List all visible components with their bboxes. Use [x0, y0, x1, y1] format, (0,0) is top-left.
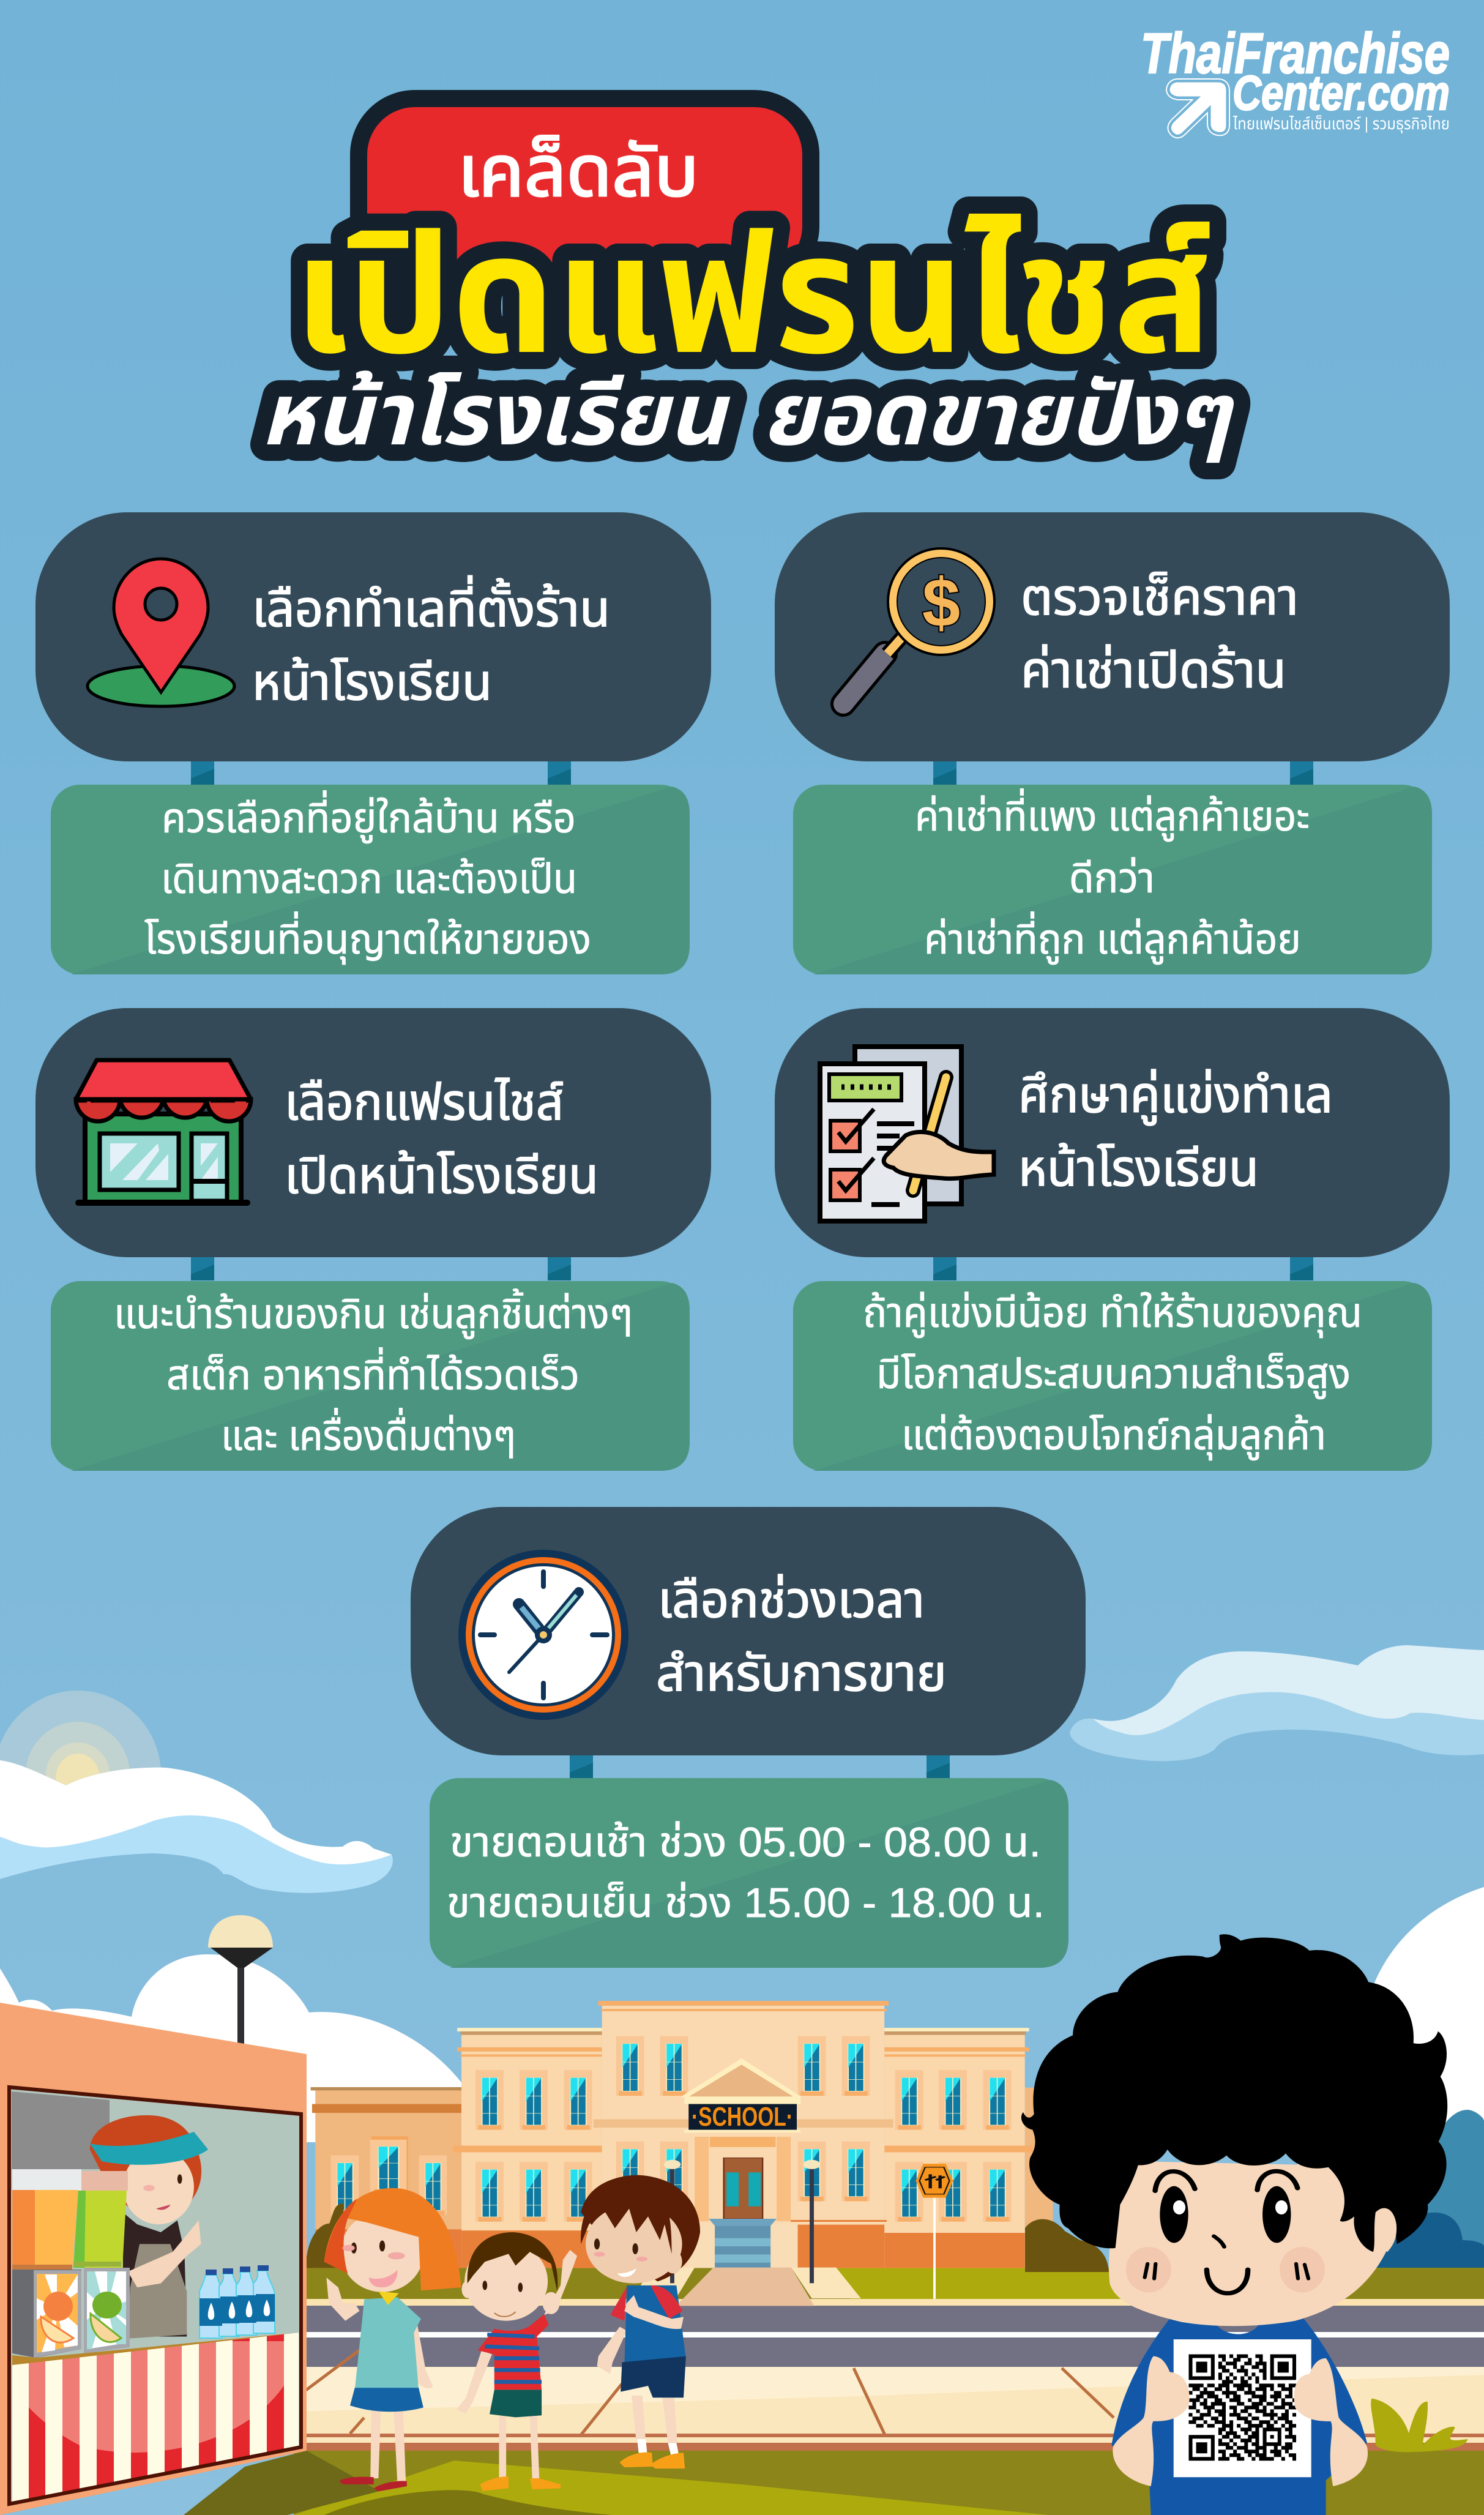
vendor — [90, 2115, 208, 2339]
water bottles — [199, 2265, 275, 2338]
juice stall — [0, 2003, 307, 2515]
heading — [1021, 570, 1299, 698]
heading: เลือกแฟรนไชส์ — [285, 1075, 564, 1130]
school sign text: ·SCHOOL· — [692, 2102, 793, 2132]
panel: rent — [775, 512, 1450, 974]
tall boy — [581, 2175, 700, 2468]
sun — [0, 1691, 161, 1858]
detail text: เดินทางสะดวก และต้องเป็น — [161, 856, 577, 902]
ground: grass road and sidewalk — [184, 2268, 1484, 2515]
heading: ศึกษาคู่แข่งทำเล — [1018, 1067, 1333, 1126]
detail text: แต่ต้องตอบโจทย์กลุ่มลูกค้า — [901, 1412, 1326, 1460]
heading: หน้าโรงเรียน — [252, 655, 492, 711]
posts — [933, 761, 1313, 785]
sign board — [35, 512, 711, 761]
fruit boxes — [12, 2268, 130, 2358]
lamp posts — [664, 2160, 820, 2283]
title block — [260, 99, 1235, 463]
panel: franchise choice — [35, 1008, 711, 1471]
heading: หน้าโรงเรียน — [1018, 1141, 1259, 1197]
detail text: และ เครื่องดื่มต่างๆ — [221, 1408, 516, 1459]
mascot with QR code — [1021, 1934, 1447, 2515]
stall body — [0, 2003, 307, 2515]
logo: ThaiFranchise Center.com — [1141, 21, 1450, 133]
counter top — [12, 2333, 299, 2366]
heading: เปิดหน้าโรงเรียน — [285, 1148, 598, 1204]
detail text — [447, 1819, 1045, 1926]
detail card — [430, 1778, 1068, 1968]
sign board — [411, 1507, 1086, 1755]
icon: storefront — [76, 1060, 251, 1203]
detail card — [793, 1281, 1432, 1471]
qr card — [1174, 2339, 1311, 2477]
stairs and path — [634, 2219, 861, 2306]
shirt — [1111, 2314, 1367, 2515]
center block — [594, 2001, 893, 2268]
girl — [324, 2188, 461, 2491]
panel: location — [35, 512, 711, 974]
striped counter — [12, 2333, 299, 2502]
left wing — [453, 2028, 602, 2268]
heading: เลือกทำเลที่ตั้งร้าน — [252, 575, 610, 637]
sign board — [35, 1008, 711, 1257]
title line: หน้าโรงเรียน: หน้าโรงเรียน — [260, 366, 730, 463]
detail text: สเต็ก อาหารที่ทำได้รวดเร็ว — [166, 1347, 580, 1399]
children — [324, 2175, 700, 2491]
detail text: ถ้าคู่แข่งมีน้อย ทำให้ร้านของคุณ — [863, 1290, 1362, 1338]
lamp post — [208, 1915, 273, 2047]
eyes and expression — [1126, 2171, 1325, 2293]
school building — [306, 2001, 1053, 2306]
arms and fists — [1113, 2356, 1368, 2486]
heading: ตรวจเช็คราคา — [1021, 570, 1299, 626]
detail text — [144, 790, 591, 965]
detail text: โรงเรียนที่อนุญาตให้ขายของ — [144, 911, 591, 965]
cloud: right — [1070, 1645, 1484, 1761]
sign board — [775, 1008, 1450, 1257]
icon: clock — [458, 1550, 628, 1720]
heading: เลือกช่วงเวลา — [658, 1572, 925, 1628]
detail card — [51, 785, 690, 974]
icon: checklist and hand — [820, 1047, 994, 1221]
title badge: red tab — [359, 99, 811, 282]
detail text: แนะนำร้านของกิน เช่นลูกชิ้นต่างๆ — [114, 1288, 633, 1339]
heading: สำหรับการขาย — [656, 1646, 947, 1702]
detail text: มีโอกาสประสบนความสำเร็จสูง — [876, 1351, 1351, 1399]
detail text — [915, 788, 1310, 965]
detail text: ดีกว่า — [1069, 855, 1155, 902]
left annex — [311, 2087, 461, 2268]
detail text: ค่าเช่าที่ถูก แต่ลูกค้าน้อย — [924, 911, 1301, 965]
foreground plant — [1371, 2399, 1468, 2452]
posts — [191, 1257, 571, 1280]
panel: selling time — [411, 1507, 1086, 1968]
detail text — [863, 1290, 1362, 1460]
logo: ThaiFranchise Center.com: ไทยแฟรนไชส์เซ็นเตอร์ | รวมธุรกิจไทย — [1232, 114, 1450, 133]
clouds behind school — [0, 1887, 1484, 2301]
frame edge — [9, 2087, 301, 2504]
distant hills right — [1371, 2110, 1484, 2301]
heading — [285, 1075, 598, 1204]
right annex edge — [1025, 2088, 1053, 2268]
hair — [1021, 1934, 1447, 2252]
detail text — [114, 1288, 633, 1459]
heading — [656, 1572, 947, 1702]
heading: ค่าเช่าเปิดร้าน — [1021, 643, 1286, 698]
title line: เปิดแฟรนไชส์: เปิดแฟรนไชส์ — [294, 201, 1212, 387]
heading — [1018, 1067, 1333, 1197]
icon: magnifier with dollar — [843, 553, 990, 704]
title line: ยอดขายปังๆ: ยอดขายปังๆ — [762, 366, 1235, 463]
posts — [191, 761, 571, 785]
interior shade — [12, 2091, 110, 2169]
school sign board — [688, 2104, 797, 2130]
detail text: ค่าเช่าที่แพง แต่ลูกค้าเยอะ — [915, 788, 1310, 842]
detail card — [793, 785, 1432, 974]
posts — [933, 1257, 1313, 1280]
bush right of school — [1025, 2219, 1109, 2272]
detail text: ขายตอนเย็น ช่วง 15.00 - 18.00 น. — [447, 1880, 1045, 1926]
portico with door — [680, 2058, 802, 2221]
icon: magnifier with dollar: $ — [922, 564, 960, 641]
sign board — [775, 512, 1450, 761]
detail card — [51, 1281, 690, 1471]
windows — [475, 2036, 1012, 2222]
ear — [1375, 2208, 1396, 2252]
right wing — [884, 2028, 1033, 2268]
cloud: left — [0, 1760, 393, 1893]
panel: competitors — [775, 1008, 1450, 1471]
title line: เคล็ดลับ: เคล็ดลับ — [458, 132, 699, 211]
detail text: ควรเลือกที่อยู่ใกล้บ้าน หรือ — [162, 790, 576, 843]
bush behind annex — [306, 2203, 343, 2268]
juice tanks — [12, 2169, 128, 2270]
crossing sign — [915, 2164, 953, 2299]
icon: map pin — [88, 559, 234, 706]
boy in stripes — [457, 2232, 577, 2491]
window frame — [9, 2087, 301, 2504]
heading — [252, 575, 610, 711]
posts — [570, 1755, 950, 1779]
face — [1109, 2161, 1396, 2326]
detail text: ขายตอนเช้า ช่วง 05.00 - 08.00 น. — [450, 1819, 1041, 1866]
